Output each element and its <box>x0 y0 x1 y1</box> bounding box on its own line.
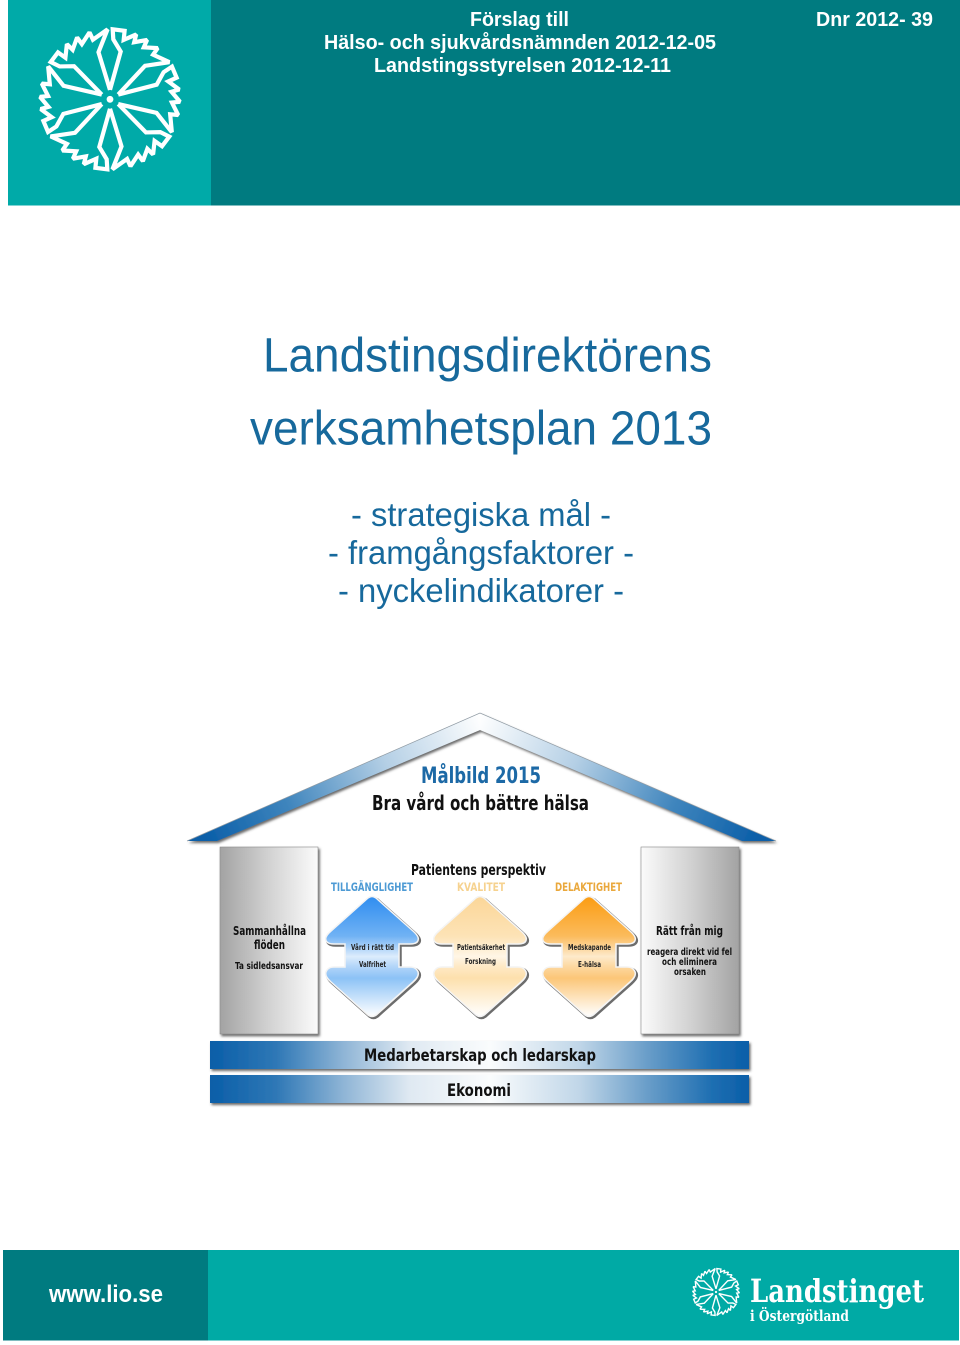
arrow: delaktighet <box>543 896 637 1018</box>
perspective heading: Patientens perspektiv <box>411 861 546 879</box>
right pillar: reagera direkt vid fel <box>647 947 732 958</box>
footer organisation name: Landstinget <box>750 1272 924 1310</box>
perspective heading: KVALITET <box>457 880 505 894</box>
footer organisation name: i Östergötland <box>750 1306 849 1325</box>
header band <box>8 0 960 206</box>
subtitle: - nyckelindikatorer - <box>338 573 624 610</box>
perspective heading <box>331 861 622 894</box>
left pillar <box>220 847 318 1034</box>
bar: medarbetarskap <box>210 1041 749 1069</box>
footer band <box>3 1250 959 1340</box>
subtitle: - strategiska mål - <box>351 497 611 534</box>
icon: snowflake logo <box>20 13 200 186</box>
left pillar: flöden <box>254 938 285 952</box>
arrow: kvalitet <box>434 896 528 1018</box>
header submission text: Förslag till <box>470 9 569 31</box>
icon: footer snowflake logo <box>686 1263 746 1321</box>
roof heading <box>372 763 589 815</box>
right pillar <box>641 847 739 1034</box>
title: verksamhetsplan 2013 <box>250 402 712 456</box>
perspective heading: TILLGÄNGLIGHET <box>331 879 413 894</box>
house diagram <box>187 713 776 1103</box>
footer url panel: www.lio.se <box>48 1281 163 1308</box>
header submission text: Landstingsstyrelsen 2012-12-11 <box>374 55 671 77</box>
header submission text: Hälso- och sjukvårdsnämnden 2012-12-05 <box>324 31 716 54</box>
arrow: tillgänglighet: Valfrihet <box>359 960 386 969</box>
arrow: kvalitet: Forskning <box>465 957 496 966</box>
subtitle <box>328 497 634 610</box>
subtitle: - framgångsfaktorer - <box>328 535 634 572</box>
document number: Dnr 2012- 39 <box>816 9 933 31</box>
arrow: tillgänglighet <box>326 896 420 1018</box>
arrow: tillgänglighet: Vård i rätt tid <box>351 943 394 952</box>
right pillar: orsaken <box>674 967 706 978</box>
bar: ekonomi <box>210 1075 749 1103</box>
arrow: delaktighet: Medskapande <box>568 943 611 952</box>
title <box>250 330 712 456</box>
roof heading: Målbild 2015 <box>421 763 541 789</box>
roof heading: Bra vård och bättre hälsa <box>372 791 589 815</box>
right pillar: och eliminera <box>662 957 717 968</box>
left pillar: Sammanhållna <box>233 924 306 938</box>
footer organisation name <box>750 1272 924 1325</box>
arrow: kvalitet: Patientsäkerhet <box>457 943 505 952</box>
right pillar: Rätt från mig <box>656 924 723 938</box>
left pillar: Ta sidledsansvar <box>235 961 303 972</box>
arrow: delaktighet: E-hälsa <box>578 960 601 969</box>
roof <box>187 713 776 841</box>
bar: ekonomi: Ekonomi <box>447 1081 511 1101</box>
perspective heading: DELAKTIGHET <box>555 880 622 894</box>
bar: medarbetarskap: Medarbetarskap och ledarskap <box>364 1046 596 1066</box>
header logo panel <box>8 0 211 206</box>
header submission text <box>324 9 716 77</box>
title: Landstingsdirektörens <box>263 330 712 382</box>
footer url panel <box>3 1250 208 1340</box>
